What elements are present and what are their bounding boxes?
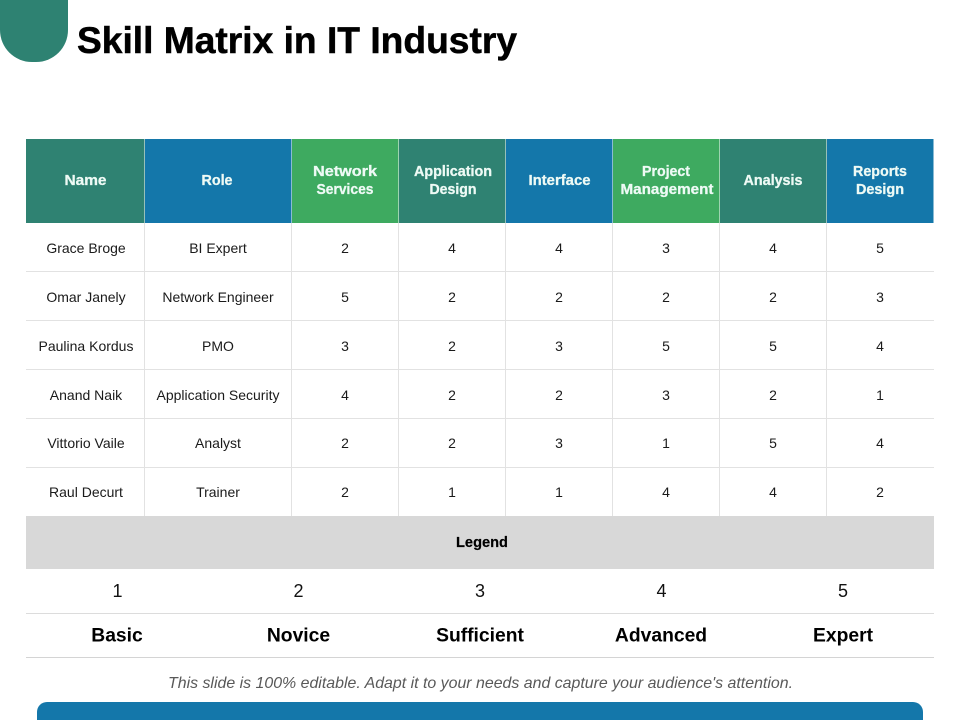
row: Vittorio Vaile: 2 (341, 435, 349, 451)
row: Anand Naik: Application Security (157, 387, 279, 403)
row: Omar Janely: 2 (769, 289, 777, 305)
legend labels: Basic (91, 626, 143, 646)
row: Vittorio Vaile: Analyst (195, 435, 241, 451)
legend numbers: 1 (112, 581, 123, 601)
row: Raul Decurt: 4 (662, 484, 670, 500)
legend numbers: 3 (475, 581, 485, 601)
row: Omar Janely: 2 (555, 289, 563, 305)
row: Raul Decurt: Raul Decurt (49, 484, 123, 500)
row: Raul Decurt (49, 484, 884, 500)
row: Paulina Kordus: 3 (555, 338, 563, 354)
row: Raul Decurt: 1 (555, 484, 563, 500)
row: Vittorio Vaile: 3 (555, 435, 563, 451)
row: Anand Naik (50, 387, 884, 403)
row: Anand Naik: 2 (448, 387, 456, 403)
legend numbers: 4 (656, 581, 667, 601)
row: Anand Naik: 4 (341, 387, 349, 403)
row: Paulina Kordus: 5 (662, 338, 670, 354)
row: Grace Broge: 5 (876, 240, 884, 256)
row: Omar Janely: Network Engineer (162, 289, 274, 305)
row: Raul Decurt: 2 (341, 484, 349, 500)
legend numbers: 2 (293, 581, 304, 601)
row: Grace Broge (46, 240, 884, 256)
table header row: Design (856, 181, 904, 198)
row: Raul Decurt: 4 (769, 484, 777, 500)
row: Anand Naik: 2 (555, 387, 563, 403)
row: Omar Janely: 5 (341, 289, 349, 305)
bottom bar (37, 702, 923, 720)
row: Vittorio Vaile: 2 (448, 435, 456, 451)
row: Paulina Kordus (39, 338, 884, 354)
table header row: Reports (853, 163, 907, 180)
row: Grace Broge: 4 (769, 240, 777, 256)
row: Grace Broge: 4 (448, 240, 456, 256)
legend labels: Sufficient (436, 626, 524, 646)
table header row: Network (313, 163, 378, 180)
row: Vittorio Vaile: 1 (662, 435, 670, 451)
table header row: Management (620, 181, 714, 198)
row: Paulina Kordus: 4 (876, 338, 884, 354)
panel: legend (26, 516, 934, 658)
row: Vittorio Vaile: Vittorio Vaile (47, 435, 125, 451)
table header row: Analysis (744, 172, 802, 189)
row: Raul Decurt: Trainer (196, 484, 240, 500)
legend numbers: 5 (838, 581, 848, 601)
legend numbers (112, 581, 848, 601)
table header row: Design (430, 181, 476, 198)
row: Vittorio Vaile (47, 435, 884, 451)
row: Paulina Kordus: Paulina Kordus (39, 338, 133, 354)
row: Paulina Kordus: 5 (769, 338, 777, 354)
table header row: Name (64, 172, 106, 189)
legend labels: Advanced (615, 626, 707, 646)
row: Vittorio Vaile: 5 (769, 435, 777, 451)
table header row: Role (202, 172, 232, 189)
table header row: Project (642, 163, 690, 180)
row: Anand Naik: 2 (769, 387, 777, 403)
row: Raul Decurt: 2 (876, 484, 884, 500)
row: Grace Broge: 2 (341, 240, 349, 256)
row: Paulina Kordus: 3 (341, 338, 349, 354)
row: Grace Broge: 3 (662, 240, 670, 256)
row: Anand Naik: 1 (876, 387, 884, 403)
row: Anand Naik: 3 (662, 387, 670, 403)
row: Paulina Kordus: PMO (202, 338, 234, 354)
row: Vittorio Vaile: 4 (876, 435, 884, 451)
legend labels (91, 626, 874, 646)
icon: teal corner shape (0, 0, 68, 62)
row: Omar Janely: 2 (662, 289, 670, 305)
table header row: Services (316, 181, 374, 198)
legend heading: Legend (456, 535, 508, 551)
legend labels: Novice (267, 626, 330, 646)
title: Skill Matrix in IT Industry (77, 20, 517, 61)
row: Grace Broge: BI Expert (189, 240, 247, 256)
row: Omar Janely: 3 (876, 289, 884, 305)
row: Grace Broge: Grace Broge (46, 240, 126, 256)
row: Paulina Kordus: 2 (448, 338, 456, 354)
row: Omar Janely (46, 289, 884, 305)
table header row (26, 139, 934, 223)
row: Anand Naik: Anand Naik (50, 387, 123, 403)
legend heading (26, 516, 934, 569)
panel: skill matrix table (26, 139, 934, 516)
table header row: Interface (528, 172, 590, 189)
row: Raul Decurt: 1 (448, 484, 456, 500)
row: Grace Broge: 4 (555, 240, 563, 256)
footer note: This slide is 100% editable. Adapt it to your needs and capture your audience's attention. (168, 675, 793, 692)
legend labels: Expert (813, 626, 874, 646)
table header row: Application (414, 163, 492, 180)
row: Omar Janely: 2 (448, 289, 456, 305)
row: Omar Janely: Omar Janely (46, 289, 126, 305)
